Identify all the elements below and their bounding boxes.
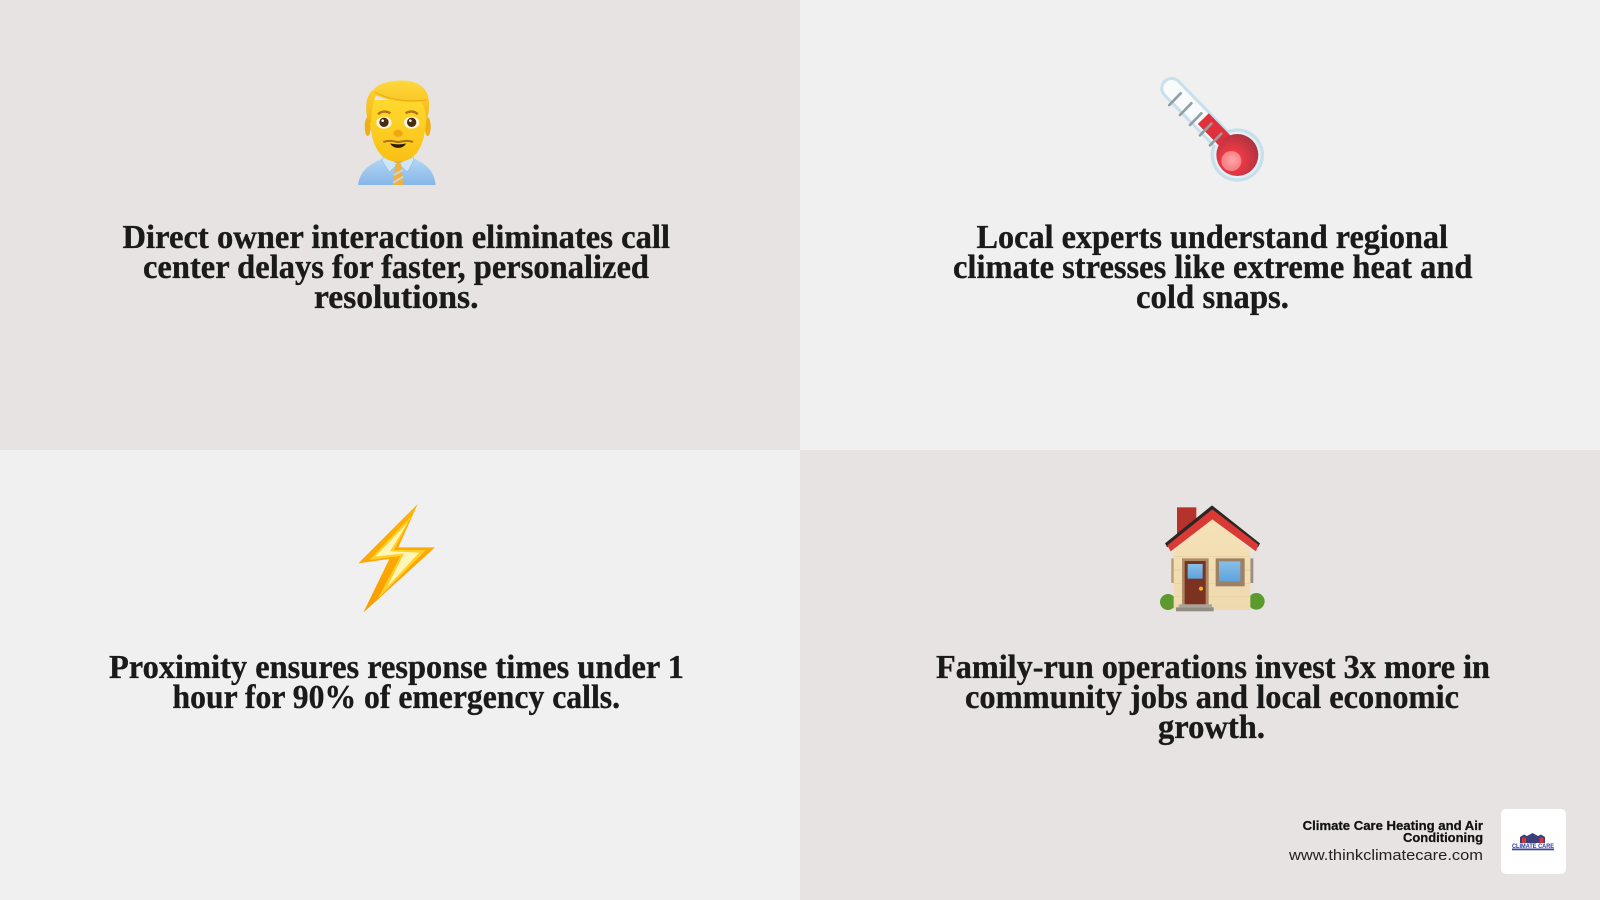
heading: regional climate: cold snaps. — [1136, 279, 1289, 316]
heading: response times: hour for 90% of emergency calls. — [172, 679, 620, 716]
heading: response times: Proximity ensures response times under 1 — [109, 649, 684, 686]
panel: response times — [0, 450, 800, 900]
icon: man in shirt and tie — [358, 80, 436, 185]
company name and website — [1288, 819, 1483, 864]
company name and website: www.thinkclimatecare.com — [1288, 847, 1483, 864]
heading: regional climate — [953, 219, 1473, 316]
heading: owner interaction — [122, 219, 670, 316]
heading: family-run operations: community jobs and local economic — [965, 679, 1459, 716]
icon: house — [1160, 505, 1265, 611]
company name and website: Conditioning — [1403, 831, 1483, 845]
heading: owner interaction: Direct owner interaction eliminates call — [122, 219, 670, 256]
heading: regional climate: Local experts understand regional — [976, 219, 1448, 256]
heading: family-run operations — [936, 649, 1490, 746]
logo card — [1501, 809, 1566, 874]
company name and website: Climate Care Heating and Air — [1303, 819, 1483, 833]
heading: response times — [109, 649, 684, 716]
heading: owner interaction: center delays for faster, personalized — [143, 249, 649, 286]
heading: owner interaction: resolutions. — [314, 279, 478, 316]
heading: regional climate: climate stresses like extreme heat and — [953, 249, 1473, 286]
icon: lightning bolt — [358, 504, 435, 613]
logo card: CLIMATE CARE — [1512, 843, 1555, 850]
heading: family-run operations: Family-run operations invest 3x more in — [936, 649, 1490, 686]
heading: family-run operations: growth. — [1158, 709, 1265, 746]
icon: thermometer — [1169, 88, 1264, 182]
panel: regional climate — [800, 0, 1600, 450]
panel: family-run operations — [800, 450, 1600, 900]
panel: owner interaction — [0, 0, 800, 450]
